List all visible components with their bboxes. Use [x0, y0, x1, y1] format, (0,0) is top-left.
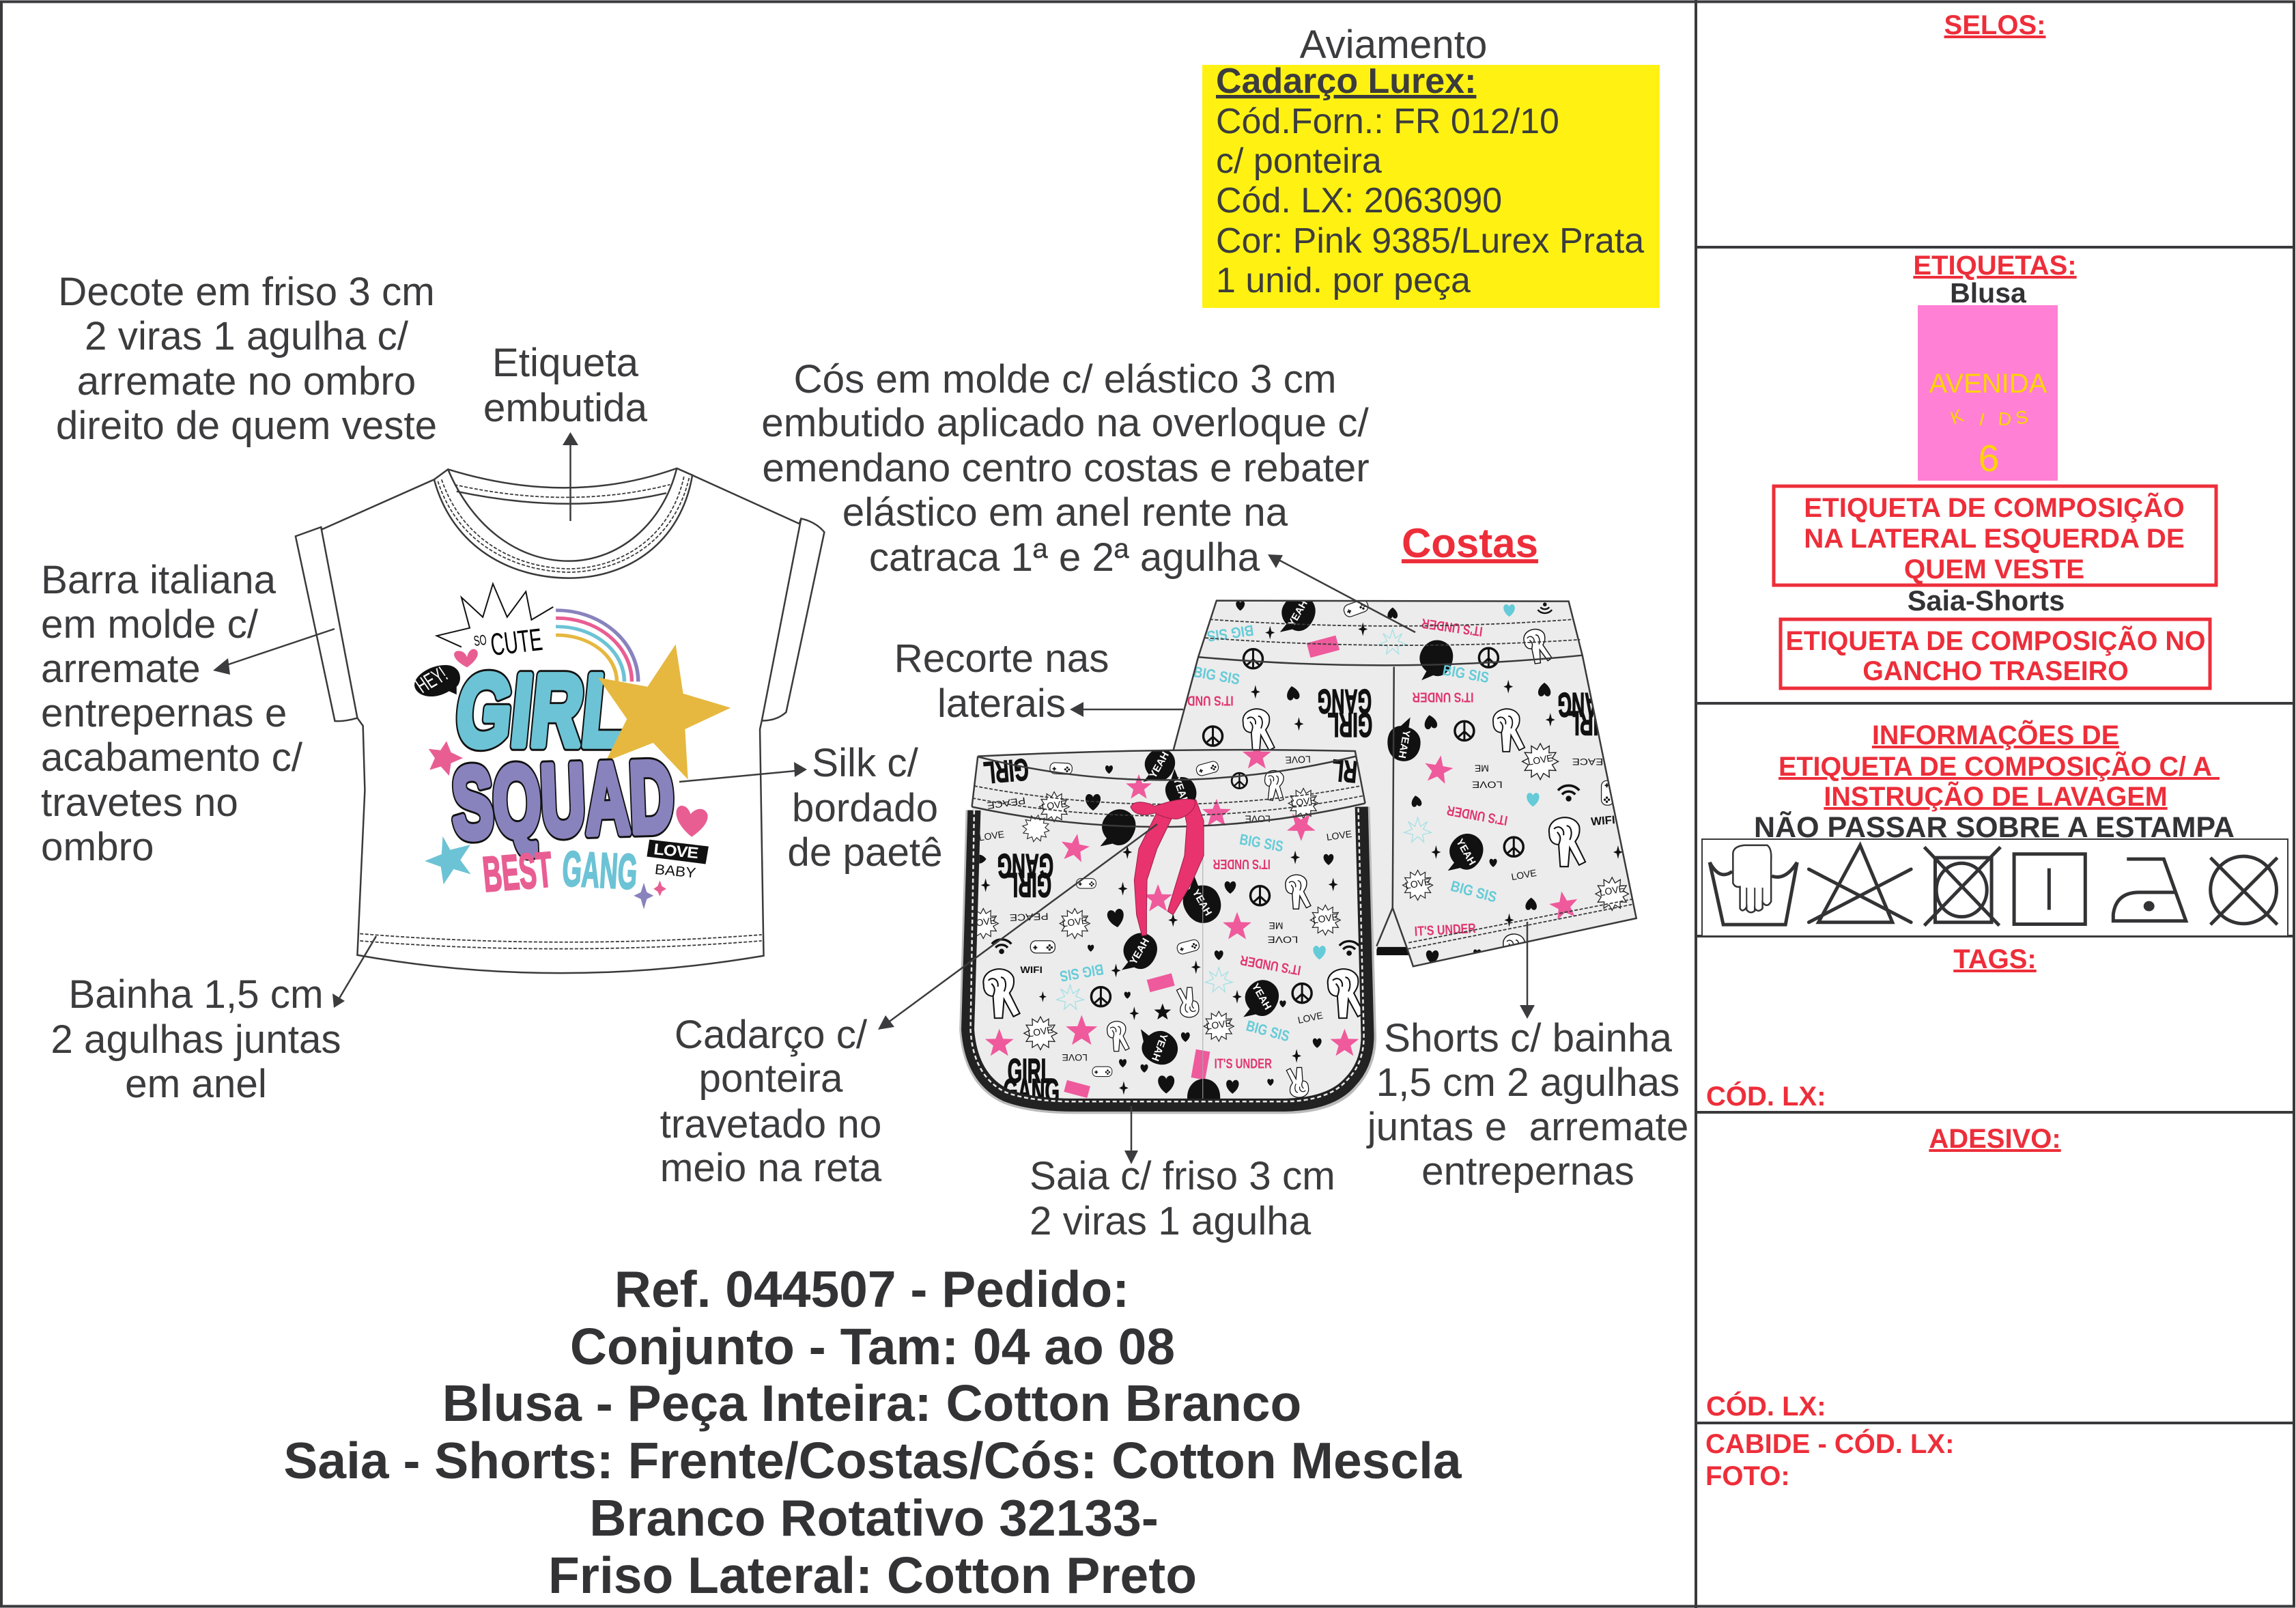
- illustration: skirt front: [963, 742, 1372, 1123]
- panel: selos: SELOS:: [1944, 10, 2045, 40]
- callout: bainha: Bainha 1,5 cm: [68, 972, 324, 1017]
- panel: aviamento yellow box: [1202, 61, 1660, 308]
- print pattern: front: PEACE: [1010, 911, 1049, 922]
- print pattern: back: BIG SIS: [1441, 662, 1490, 686]
- callout: bainha: em anel: [125, 1062, 267, 1106]
- print pattern: front: YEAH: [1171, 776, 1191, 806]
- print: pink heart: [454, 649, 478, 667]
- panel: cabide foto: FOTO:: [1705, 1461, 1790, 1491]
- arrow: shorts: [1520, 922, 1535, 1019]
- print pattern: front: RL: [1331, 753, 1359, 789]
- print pattern: back: PEACE: [1572, 757, 1611, 767]
- print pattern: back: IT'S UNDER: [1414, 920, 1476, 939]
- title block: ficha: Saia - Shorts: Frente/Costas/Cós: Cotton Mescla: [283, 1432, 1462, 1489]
- callout: barra italiana: entrepernas e: [41, 691, 287, 735]
- callout: etiqueta embutida: [483, 341, 648, 430]
- print pattern: back: YEAH: [1454, 837, 1478, 867]
- brand tag: avenida kids: [1918, 305, 2058, 481]
- print: teal star: [425, 836, 471, 884]
- print: squad lettering: SQUAD: [450, 740, 676, 860]
- print pattern: front: GIRL: [982, 752, 1030, 791]
- care symbols box: [1702, 839, 2288, 936]
- icon: line dry: [2014, 854, 2085, 924]
- callout: saia friso: Saia c/ friso 3 cm: [1030, 1154, 1335, 1198]
- callout: silk: bordado: [792, 786, 938, 830]
- print pattern: back: LOVE: [1598, 883, 1626, 898]
- arrow: barra italiana: [213, 629, 335, 675]
- callout box: composicao shorts: ETIQUETA DE COMPOSIÇÃO NO: [1786, 626, 2205, 656]
- print pattern: front: GIRL: [1008, 1052, 1052, 1090]
- print: pink star: [429, 741, 463, 776]
- print pattern: front: LOVE: [1206, 1017, 1232, 1032]
- print pattern: front: PEACE: [987, 795, 1026, 810]
- print pattern: front: LOVE: [1296, 1010, 1324, 1026]
- print pattern: front: LOVE: [1062, 1052, 1088, 1063]
- print: so cute burst: SO: [472, 632, 487, 649]
- print pattern: back: GIRL: [1568, 704, 1613, 743]
- print pattern: front: IT'S UNDER: [1239, 953, 1302, 978]
- print pattern: back: WIFI: [1590, 813, 1615, 828]
- print pattern: front: LOVE: [970, 914, 997, 929]
- print pattern: front: [968, 742, 1364, 1123]
- title block: ficha: Branco Rotativo 32133-: [589, 1489, 1159, 1547]
- callout: cos em molde: Cós em molde c/ elástico 3 cm: [793, 357, 1337, 401]
- callout: shorts bainha: [1366, 1016, 1688, 1194]
- print: girl lettering: GIRL: [451, 654, 632, 767]
- callout box: composicao blusa: ETIQUETA DE COMPOSIÇÃO: [1804, 492, 2185, 523]
- panel: aviamento yellow box: Cód.Forn.: FR 012/10: [1216, 102, 1559, 141]
- arrow: cos: [1268, 554, 1415, 632]
- print pattern: front: YEAH: [1128, 936, 1152, 967]
- arrow: recorte nas laterais: [1070, 702, 1183, 717]
- panel: tags: [1706, 944, 2037, 1112]
- panel: adesivo: ADESIVO:: [1929, 1124, 2061, 1154]
- callout: barra italiana: ombro: [41, 825, 154, 869]
- print pattern: back: GANG: [1557, 686, 1612, 723]
- print pattern: front: YEAH: [1190, 888, 1214, 918]
- heading: informacoes: INSTRUÇÃO DE LAVAGEM: [1824, 782, 2168, 812]
- panel: cabide foto: CABIDE - CÓD. LX:: [1705, 1428, 1954, 1459]
- panel: adesivo: [1706, 1124, 2061, 1422]
- panel: aviamento yellow box: Cód. LX: 2063090: [1216, 181, 1502, 221]
- arrow: cadarco: [878, 824, 1157, 1030]
- arrow: silk: [679, 762, 807, 782]
- callout: cadarco: travetado no: [660, 1102, 881, 1146]
- print: squad lettering: SQUAD: [450, 740, 676, 860]
- drawstring: [1131, 799, 1204, 935]
- callout: recorte nas laterais: laterais: [937, 681, 1066, 726]
- print pattern: front: GIRL: [1006, 866, 1051, 905]
- print: rainbow: [556, 610, 638, 681]
- callout: shorts bainha: Shorts c/ bainha: [1384, 1016, 1673, 1060]
- callout box: composicao blusa: QUEM VESTE: [1904, 554, 2084, 584]
- illustration: t-shirt: GANG: [561, 841, 639, 900]
- title block: ficha: Friso Lateral: Cotton Preto: [548, 1547, 1197, 1604]
- callout: shorts bainha: entrepernas: [1421, 1149, 1634, 1194]
- print pattern: front: LOVE: [1326, 828, 1352, 843]
- print pattern: back: IT'S UNDER: [1421, 616, 1484, 639]
- print pattern: front: GANG: [997, 847, 1053, 886]
- label: saia-shorts: Saia-Shorts: [1908, 584, 2065, 617]
- print pattern: front: YEAH: [1249, 981, 1273, 1012]
- callout: cadarco: ponteira: [698, 1056, 843, 1101]
- icon: do not tumble dry: [1925, 847, 2000, 926]
- panel: aviamento yellow box: Cor: Pink 9385/Lurex Prata: [1216, 221, 1644, 261]
- arrow: bainha: [332, 936, 376, 1008]
- print pattern: front: GANG: [1003, 1071, 1060, 1110]
- title block: ficha: Ref. 044507 - Pedido:: [614, 1260, 1129, 1318]
- callout: decote: direito de quem veste: [56, 404, 437, 448]
- callout box: composicao shorts: [1781, 619, 2210, 688]
- print pattern: front: YEAH: [1149, 1032, 1170, 1062]
- print: so cute burst: CUTE: [488, 622, 544, 662]
- skirt edge trim: [967, 807, 1369, 1106]
- callout: bainha: 2 agulhas juntas: [51, 1017, 341, 1062]
- icon: iron: [2113, 859, 2186, 921]
- icon: do not dry clean: [2211, 856, 2278, 925]
- callout: shorts bainha: 1,5 cm 2 agulhas: [1376, 1060, 1680, 1105]
- callout: saia friso: [1030, 1154, 1335, 1243]
- arrow: etiqueta: [563, 432, 578, 521]
- print: love baby: BABY: [654, 861, 697, 881]
- print: heart right: [676, 806, 708, 837]
- callout: barra italiana: arremate: [41, 647, 201, 691]
- print pattern: front: LOVE: [1285, 754, 1311, 765]
- heading: costas: Costas: [1402, 520, 1538, 566]
- print pattern: front: BIG SIS: [1245, 1018, 1291, 1045]
- print pattern: back: LOVE: [1472, 779, 1503, 789]
- heading: aviamento: Aviamento: [1300, 23, 1487, 67]
- print pattern: front: IT'S UNDER: [1215, 1056, 1272, 1071]
- heading: etiquetas: ETIQUETAS:: [1913, 251, 2077, 281]
- print: love baby: LOVE: [653, 841, 699, 862]
- print: hey bubble: HEY!: [411, 662, 452, 697]
- callout: bainha: [51, 972, 341, 1106]
- panel: etiquetas: [1774, 251, 2216, 688]
- callout: decote: [56, 270, 437, 448]
- callout: silk: [787, 741, 943, 875]
- print: best gang: BEST: [481, 842, 555, 903]
- print pattern: front: WIFI: [1020, 965, 1043, 976]
- panel: informacoes: [1702, 720, 2288, 936]
- callout: barra italiana: em molde c/: [41, 602, 259, 647]
- callout: cos em molde: elástico em anel rente na: [842, 490, 1288, 535]
- icon: do not bleach: [1809, 845, 1911, 922]
- callout: etiqueta embutida: Etiqueta: [492, 341, 639, 385]
- title block: ficha: Conjunto - Tam: 04 ao 08: [570, 1318, 1175, 1375]
- panel: cabide foto: [1705, 1428, 1954, 1491]
- print pattern: back: YEAH: [1286, 598, 1310, 629]
- heading: informacoes: INFORMAÇÕES DE: [1872, 720, 2119, 750]
- print: hey bubble: [411, 662, 460, 697]
- print pattern: front: IT'S UNDER: [1213, 856, 1271, 872]
- print pattern: back: ME: [1475, 763, 1489, 774]
- print pattern: front: BIG SIS: [1238, 832, 1284, 856]
- illustration: shorts back: [1171, 589, 1636, 970]
- print: girl lettering: [451, 654, 632, 767]
- arrow: saia: [1124, 1106, 1138, 1164]
- print pattern: back: BIG SIS: [1192, 664, 1241, 688]
- print pattern: front: LOVE: [978, 828, 1005, 843]
- brand tag: avenida kids: AVENIDA: [1929, 369, 2047, 399]
- print pattern: back: YEAH: [1396, 729, 1412, 759]
- print pattern: front: LOVE: [1027, 1024, 1054, 1039]
- callout: barra italiana: [41, 558, 303, 869]
- callout: cadarco: [660, 1013, 882, 1190]
- callout: cos em molde: emendano centro costas e rebater: [762, 446, 1370, 490]
- callout: silk: Silk c/: [812, 741, 919, 785]
- warning text: NÃO PASSAR SOBRE A ESTAMPA: [1754, 811, 2235, 844]
- panel: tags: CÓD. LX:: [1706, 1080, 1826, 1112]
- print pattern: front: LOVE: [1268, 934, 1298, 944]
- print pattern: front: LOVE: [1062, 914, 1088, 929]
- callout: barra italiana: travetes no: [41, 780, 238, 825]
- callout: decote: Decote em friso 3 cm: [58, 270, 435, 314]
- panel: aviamento yellow box: 1 unid. por peça: [1216, 261, 1471, 300]
- icon: hand wash: [1710, 845, 1797, 925]
- print: girl lettering: GIRL: [451, 654, 632, 767]
- print: sparkles: [634, 880, 666, 909]
- callout: decote: 2 viras 1 agulha c/: [85, 314, 409, 358]
- callout: recorte nas laterais: Recorte nas: [894, 636, 1109, 681]
- callout: etiqueta embutida: embutida: [483, 386, 648, 430]
- print: love baby: [647, 840, 709, 881]
- print pattern: front: YEAH: [1147, 750, 1172, 780]
- print pattern: front: LOVE: [1245, 813, 1271, 824]
- callout: cadarco: meio na reta: [660, 1146, 882, 1190]
- print: gold star: [598, 645, 731, 780]
- print pattern: back: GIRL: [1328, 705, 1372, 744]
- brand tag: avenida kids: KIDS: [1948, 405, 2030, 430]
- print pattern: front: LOVE: [1290, 794, 1317, 808]
- print pattern: front: BIG SIS: [1058, 960, 1105, 985]
- brand tag: avenida kids: 6: [1979, 437, 1999, 479]
- print pattern: back: LOVE: [1404, 876, 1431, 891]
- print pattern: back: IT'S UNDER: [1412, 690, 1473, 705]
- callout: cadarco: Cadarço c/: [675, 1013, 868, 1057]
- callout: barra italiana: acabamento c/: [41, 735, 303, 780]
- panel: aviamento yellow box: Cadarço Lurex:: [1216, 61, 1476, 101]
- panel: aviamento yellow box: c/ ponteira: [1216, 141, 1382, 181]
- callout: silk: de paetê: [787, 830, 943, 875]
- print pattern: front: ME: [1269, 920, 1283, 931]
- callout: barra italiana: Barra italiana: [41, 558, 277, 602]
- illustration: t-shirt: [296, 468, 824, 973]
- print: so cute burst: [437, 584, 553, 662]
- print pattern: front: LOVE: [1312, 911, 1339, 925]
- callout box: composicao blusa: [1774, 486, 2216, 585]
- print pattern: back: BIG SIS: [1206, 621, 1255, 644]
- callout: cos em molde: catraca 1ª e 2ª agulha: [869, 535, 1260, 580]
- callout box: composicao shorts: GANCHO TRASEIRO: [1862, 656, 2129, 686]
- print pattern: back: LOVE: [1527, 752, 1554, 767]
- panel: tags: TAGS:: [1953, 944, 2037, 974]
- print pattern: back: BIG SIS: [1449, 878, 1498, 906]
- print pattern: back: IT'S UNDER: [1445, 803, 1509, 828]
- print pattern: back: IT'S UNDER: [1172, 693, 1234, 708]
- print pattern: front: LOVE: [1040, 798, 1068, 813]
- label: blusa: Blusa: [1950, 277, 2027, 309]
- heading: informacoes: ETIQUETA DE COMPOSIÇÃO C/ A: [1778, 752, 2220, 782]
- callout: cos em molde: embutido aplicado na overloque c/: [761, 401, 1369, 445]
- print: squad lettering: [450, 740, 676, 860]
- title block: ficha: [283, 1260, 1462, 1604]
- callout: shorts bainha: juntas e arremate: [1366, 1105, 1688, 1149]
- panel: adesivo: CÓD. LX:: [1706, 1390, 1826, 1422]
- callout: decote: arremate no ombro: [77, 359, 416, 404]
- callout: saia friso: 2 viras 1 agulha: [1030, 1199, 1312, 1243]
- callout box: composicao blusa: NA LATERAL ESQUERDA DE: [1804, 523, 2185, 554]
- callout: cos em molde: [761, 357, 1370, 580]
- print pattern: back: [1172, 589, 1628, 970]
- title block: ficha: Blusa - Peça Inteira: Cotton Branco: [442, 1374, 1301, 1432]
- print pattern: back: LOVE: [1510, 867, 1537, 882]
- callout: recorte nas laterais: [894, 636, 1109, 726]
- print pattern: back: GANG: [1318, 682, 1372, 720]
